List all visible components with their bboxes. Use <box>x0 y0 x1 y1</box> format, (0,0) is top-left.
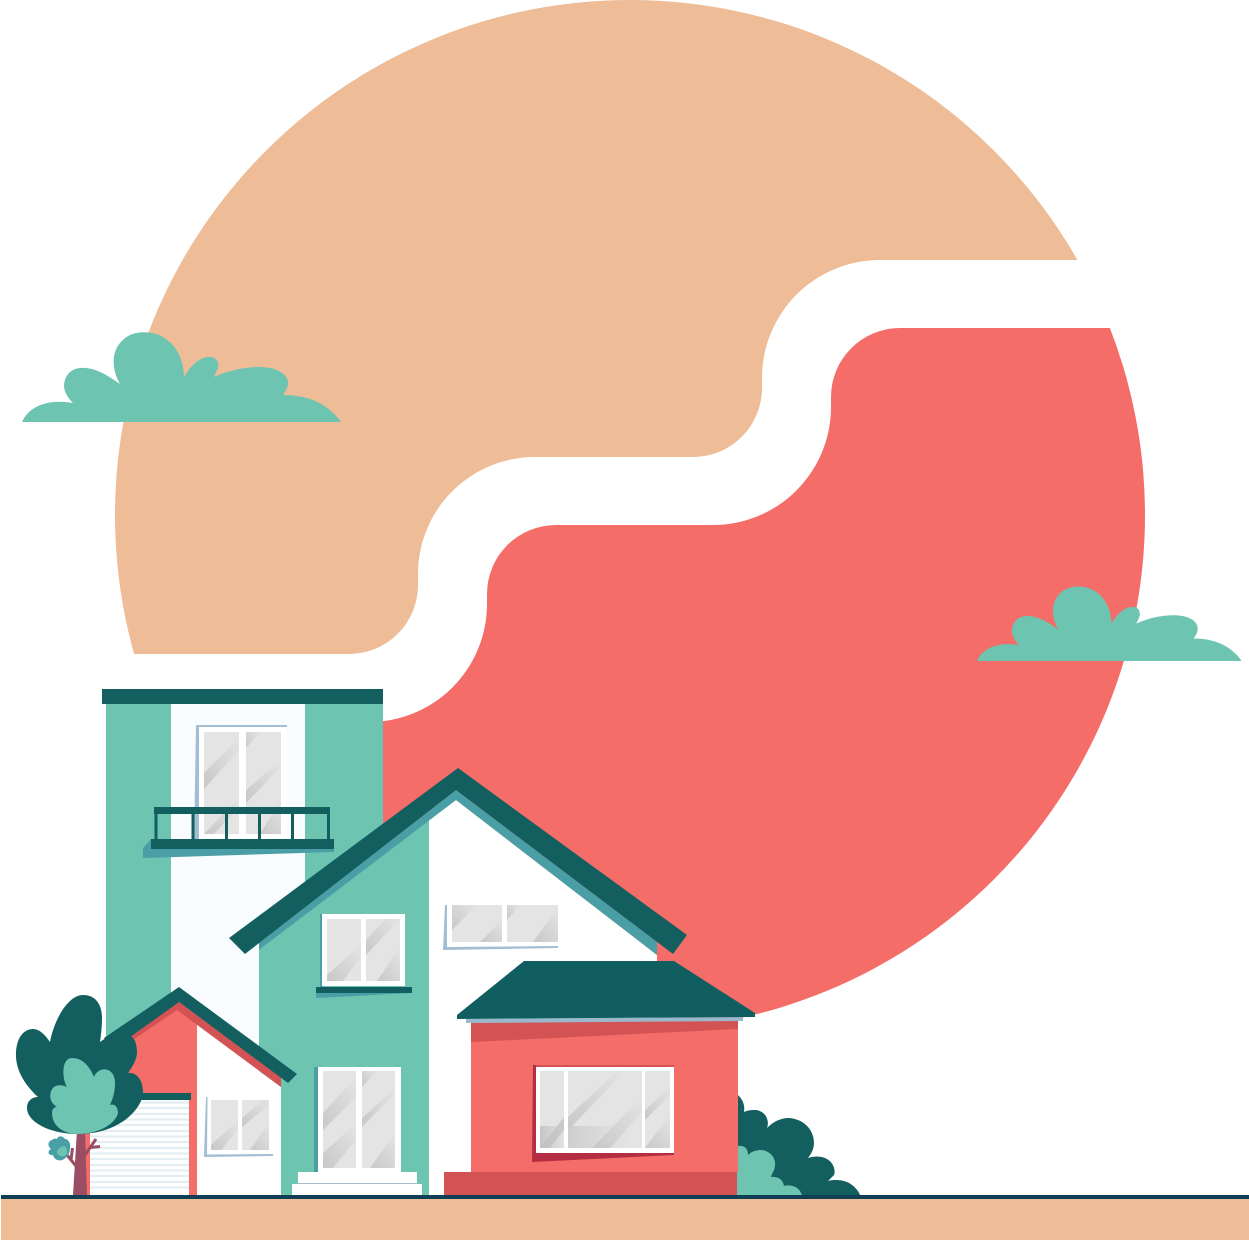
small house window <box>204 1097 273 1157</box>
cloud: right <box>977 587 1242 661</box>
middle house <box>229 768 687 1195</box>
small house <box>84 987 297 1195</box>
sun: peach half <box>115 0 1078 654</box>
tree <box>16 995 143 1195</box>
garage door <box>90 1093 191 1195</box>
red house window <box>532 1065 674 1162</box>
tree crown light <box>50 1058 118 1134</box>
middle house roof <box>229 768 687 955</box>
tree trunk <box>67 1130 100 1195</box>
door window <box>314 1067 401 1172</box>
steps <box>292 1172 422 1195</box>
tall building roof <box>102 689 383 704</box>
tall building <box>102 689 383 1195</box>
bush behind red house <box>730 1092 860 1195</box>
balcony <box>143 807 334 858</box>
small shrub <box>48 1136 70 1160</box>
upper white window <box>443 905 558 950</box>
cloud: left <box>22 332 341 422</box>
small house roof <box>104 987 297 1087</box>
ground strip <box>1 1195 1249 1240</box>
tree crown dark <box>16 995 143 1134</box>
red house roof <box>457 961 755 1023</box>
red house base <box>444 1172 737 1195</box>
tall building window <box>194 725 287 842</box>
upper green window <box>316 914 412 998</box>
red house <box>444 961 755 1195</box>
sun: red half <box>383 328 1145 1018</box>
